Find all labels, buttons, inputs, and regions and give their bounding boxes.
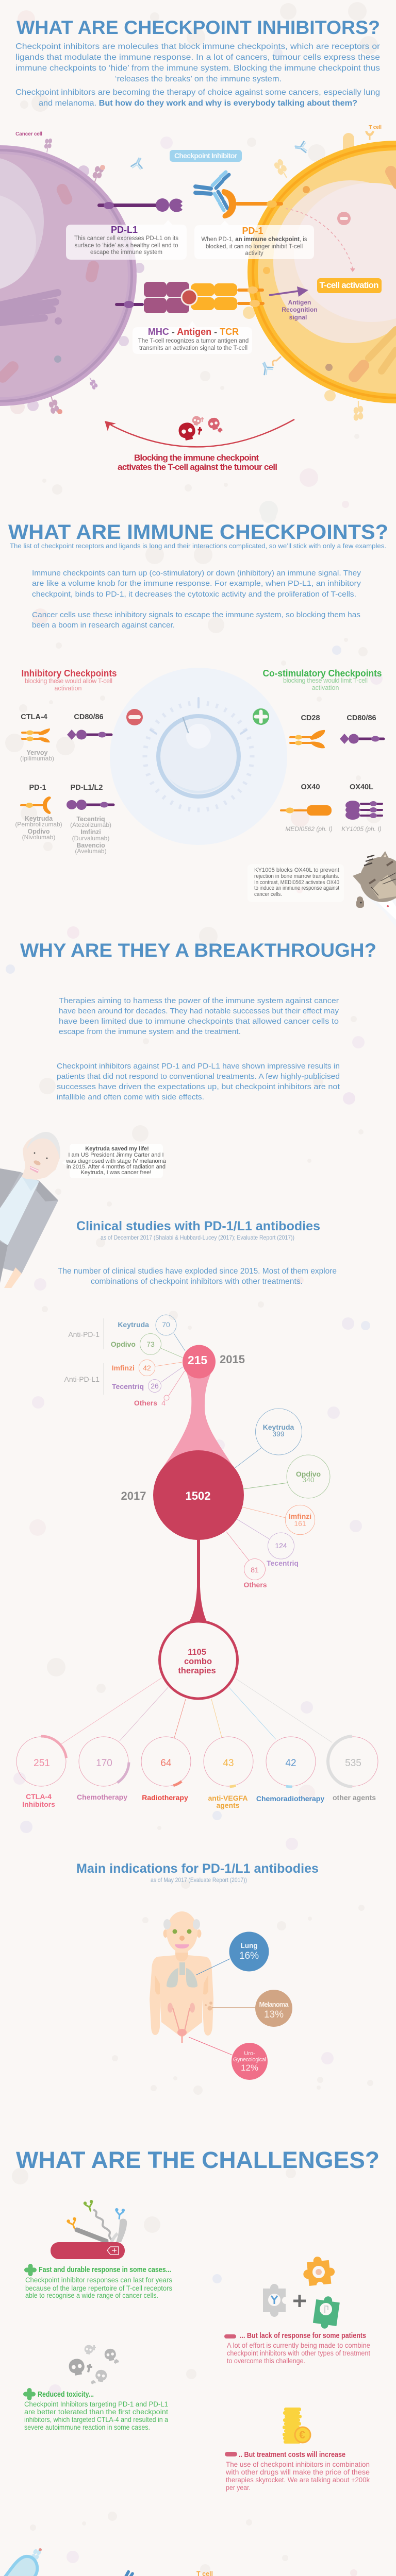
inhibitory pair: CD80/86: CD80/86: [74, 713, 104, 721]
indication: uro-gynecological: Uro-: [244, 2050, 255, 2057]
text block: therapies: escape from the immune system and the treatment.: [59, 1027, 241, 1036]
inhibitory pair: PD-L1/L2: Tecentriq: [76, 816, 105, 823]
speech bubble: Keytruda saved my life: Keytruda saved my life!: [85, 1146, 149, 1152]
challenge: treatment costs: [225, 2451, 370, 2492]
intro text block: ‘releases the breaks’ on the immune system.: [115, 75, 282, 83]
callout: PD-1: When PD-1, an immune checkpoint, is: [201, 236, 307, 243]
text block: clinical studies intro: combinations of checkpoint inhibitors with other treatments.: [91, 1277, 303, 1286]
callout: PD-1: blocked, it can no longer inhibit T-cell: [206, 244, 303, 250]
indication: uro-gynecological: 12%: [241, 2063, 258, 2073]
advantage: reduced toxicity: [24, 2391, 168, 2431]
callout: MHC antigen TCR: transmits an activation signal to the T-cell: [139, 345, 248, 351]
molecule: MHC antigen TCR complex: [115, 282, 265, 313]
text block: clinical studies intro: The number of clinical studies have exploded since 2015. Most of them explore: [58, 1267, 337, 1276]
arrow: antigen recognition signal: Recognition: [282, 306, 318, 313]
heading: co-stimulatory checkpoints: Co-stimulatory Checkpoints: [263, 668, 382, 679]
text block: therapies: Therapies aiming to harness the power of the immune system against cancer: [59, 996, 339, 1005]
molecule: checkpoint inhibitor antibody: [195, 172, 229, 210]
label: checkpoint inhibitor: Checkpoint Inhibitor: [174, 151, 238, 160]
2015 breakdown: Opdivo: [111, 1340, 136, 1348]
2017 bubble: [121, 1450, 244, 1540]
inhibitory pair: PD-1: Keytruda: [25, 815, 53, 822]
arrow: antigen recognition signal: signal: [289, 314, 307, 321]
title: what are immune checkpoints: WHAT ARE IMMUNE CHECKPOINTS?: [8, 521, 388, 544]
combination therapies bubble: 1105: [188, 1648, 206, 1657]
title: what are checkpoint inhibitors: WHAT ARE CHECKPOINT INHIBITORS?: [16, 17, 380, 38]
speech bubble: Keytruda saved my life: in 2015. After 4 months of radiation and: [67, 1164, 166, 1170]
small floating antibodies: [130, 141, 307, 376]
2017 bubble: 1502: [186, 1489, 210, 1502]
callout: PD-L1: surface to ‘hide’ as a healthy cell and to: [75, 243, 178, 249]
indication: lung: Lung: [240, 1942, 258, 1950]
indication: melanoma: [212, 1990, 292, 2027]
inhibitory pair: PD-1: PD-1: [29, 784, 46, 792]
text block: immune checkpoints: Cancer cells use these inhibitory signals to escape the immune system, so blocking them has: [32, 611, 360, 619]
inhibitory pair: PD-L1/L2: (Atezolizumab): [70, 821, 111, 828]
therapy: CTLA-4 inhibitors: [16, 1736, 67, 1808]
co-stimulatory pair: OX40: OX40: [301, 783, 320, 791]
heading: co-stimulatory checkpoints: activation: [312, 684, 339, 691]
inhibitory pair: CD80/86: [67, 713, 111, 740]
co-stimulatory pair: OX40: MEDI0562 (ph. I): [285, 825, 333, 833]
inhibitory pair: PD-1: (Nivolumab): [22, 834, 55, 841]
illustration: T cell: [243, 131, 396, 420]
2015 breakdown: [64, 1315, 185, 1407]
challenge: lack of response: [224, 2332, 370, 2365]
indication: uro-gynecological: [189, 2037, 268, 2080]
inhibitory pair: PD-L1/L2: (Avelumab): [75, 848, 107, 855]
2017 breakdown: Imfinzi: [289, 1512, 311, 1520]
indication: lung: 16%: [239, 1951, 259, 1961]
therapy: radiotherapy: [130, 1726, 202, 1802]
heading: clinical studies: Clinical studies with PD-1/L1 antibodies: [76, 1219, 320, 1233]
inhibitory pair: PD-L1/L2: Imfinzi: [80, 828, 101, 836]
illustration: puzzle pieces: [263, 2255, 340, 2330]
2017 breakdown: 124: [275, 1541, 287, 1550]
2017 breakdown: Others: [243, 1581, 267, 1589]
text block: therapies: have been around for decades. They had notable successes but their effect may: [59, 1007, 339, 1015]
callout: KY1005 note: cancer cells.: [254, 891, 282, 897]
therapy: other agents: 535: [345, 1758, 361, 1769]
callout: KY1005 note: rejection in bone marrow transplants.: [254, 873, 339, 879]
advantage: fast and durable response: Fast and durable response in some cases...: [39, 2266, 171, 2274]
therapy: anti-VEGFA agents: 43: [223, 1758, 234, 1769]
2017 breakdown: Keytruda: [263, 1423, 294, 1431]
advantage: fast and durable response: able to recognise a wide range of cancer cells.: [25, 2292, 158, 2299]
therapy: chemotherapy: 170: [96, 1758, 112, 1769]
therapy: chemoradiotherapy: 42: [285, 1758, 296, 1769]
icon: grey skulls: [68, 2344, 119, 2384]
co-stimulatory pair: OX40L: OX40L: [350, 783, 373, 791]
2017 bubble: 2017: [121, 1489, 146, 1502]
callout: PD-L1: [66, 220, 187, 260]
illustration: cat with lab coat and mouse: [353, 851, 396, 927]
advantage: reduced toxicity: Reduced toxicity...: [38, 2391, 94, 2399]
inhibitory pair: CTLA-4: (Ipilimumab): [20, 755, 54, 762]
label: checkpoint inhibitor: [170, 150, 242, 162]
illustration: antigen presenting cell: [0, 2548, 58, 2576]
therapy: anti-VEGFA agents: agents: [216, 1801, 240, 1809]
challenge: treatment costs: per year.: [226, 2484, 251, 2492]
2015 breakdown: 73: [146, 1340, 155, 1348]
inhibitory pair: PD-L1/L2: [67, 784, 113, 855]
heading: co-stimulatory checkpoints: blocking these would limit T-cell: [283, 677, 368, 684]
therapy: anti-VEGFA agents: [197, 1730, 260, 1809]
therapy: chemotherapy: [77, 1735, 130, 1801]
callout: KY1005 note: [248, 864, 344, 902]
co-stimulatory pair: CD28: [290, 714, 325, 748]
callout: PD-1: activity: [245, 250, 263, 257]
2015 bubble: [183, 1345, 245, 1379]
callout: PD-L1: PD-L1: [111, 225, 138, 235]
speech bubble: Keytruda saved my life: [62, 1144, 167, 1178]
icon: coin stack: €: [299, 2429, 305, 2441]
inhibitory pair: CTLA-4: CTLA-4: [21, 713, 47, 721]
indication: melanoma: 13%: [264, 2009, 284, 2020]
text block: immune checkpoints: been a boom in research against cancer.: [32, 621, 175, 630]
text block: immune checkpoints: are like a volume knob for the immune response. For example, when PD-L1, an inhibitory: [32, 579, 361, 588]
inhibitory pair: CTLA-4: [20, 713, 54, 762]
therapy: anti-VEGFA agents: anti-VEGFA: [208, 1794, 248, 1802]
2017 breakdown: 161: [294, 1519, 306, 1528]
text block: results: patients that did not respond to conventional treatments. A few highly-publicised: [57, 1072, 340, 1081]
chart: clinical studies bubble flow: [16, 1315, 380, 1809]
2015 breakdown: Tecentriq: [112, 1382, 144, 1391]
arrow: red arc: [105, 419, 294, 447]
inhibitory pair: PD-1: [15, 784, 62, 841]
2017 breakdown: 399: [272, 1430, 285, 1438]
label: T-cell activation: T-cell activation: [320, 280, 378, 290]
intro text block: Checkpoint inhibitors are becoming the therapy of choice against some cancers, especially lung: [15, 88, 380, 97]
heading: inhibitory checkpoints: Inhibitory Checkpoints: [22, 668, 117, 679]
advantage: reduced toxicity: Checkpoint Inhibitors targeting PD-1 and PD-L1: [24, 2400, 168, 2408]
inhibitory pair: PD-L1/L2: PD-L1/L2: [71, 784, 103, 792]
text: blocking the immune checkpoint: activates the T-cell against the tumour cell: [118, 462, 277, 472]
advantage: fast and durable response: because of the large repertoire of T-cell receptors: [25, 2284, 172, 2292]
therapy: other agents: [327, 1735, 380, 1802]
2015 breakdown: Anti-PD-1: [68, 1330, 100, 1338]
2017 breakdown: 81: [251, 1566, 259, 1574]
heading: co-stimulatory checkpoints: [263, 668, 382, 691]
intro text block: ligands that modulate the immune response. In a lot of cancers, tumour cells express these: [15, 53, 380, 62]
co-stimulatory pair: CD80/86: CD80/86: [346, 714, 376, 722]
2015 bubble: 215: [188, 1353, 207, 1367]
challenge: lack of response: ... But lack of response for some patients: [240, 2332, 366, 2340]
2015 bubble: 2015: [220, 1353, 245, 1366]
heading: inhibitory checkpoints: [22, 668, 117, 692]
volume knob dial: [110, 668, 287, 845]
co-stimulatory pair: CD80/86: [340, 714, 384, 744]
callout: MHC antigen TCR: [133, 321, 252, 354]
label: cancer cell: Cancer cell: [15, 131, 42, 137]
therapy: chemotherapy: Chemotherapy: [77, 1793, 127, 1801]
callout: PD-1: [194, 221, 314, 259]
speech bubble: Keytruda saved my life: Keytruda, I was cancer free!: [81, 1170, 151, 1176]
illustration: swiss army knife: [51, 2200, 127, 2259]
illustration: human body: [150, 1911, 213, 2043]
callout: PD-L1: This cancer cell expresses PD-L1 on its: [74, 235, 178, 242]
co-stimulatory pair: OX40L: [341, 783, 382, 833]
challenge: lack of response: A lot of effort is currently being made to combine: [227, 2342, 370, 2349]
heading: main indications: Main indications for PD-1/L1 antibodies: [76, 1861, 319, 1876]
illustration: cancer cell: [0, 138, 144, 414]
speech bubble: Keytruda saved my life: I am US President Jimmy Carter and I: [68, 1152, 164, 1158]
text block: results: [57, 1062, 340, 1101]
text: blocking the immune checkpoint: Blocking the immune checkpoint: [134, 453, 259, 463]
intro text block: [15, 42, 381, 108]
challenge: treatment costs: with other drugs will make the price of these: [225, 2468, 370, 2476]
connectors to therapy circles: [61, 1678, 332, 1744]
subtitle: The list of checkpoint receptors and ligands is long and their interactions complicated, so we’ll stick with only a few examples.: [10, 543, 386, 550]
callout: KY1005 note: to induce an immune response against: [254, 885, 339, 891]
text block: immune checkpoints: Immune checkpoints can turn up (co-stimulatory) or down (inhibitory) an immune signal. They: [32, 569, 361, 578]
icon: plus: [253, 708, 269, 725]
molecule: PD-1: [222, 189, 283, 218]
2015 breakdown: 4: [161, 1399, 166, 1407]
2015 breakdown: Anti-PD-L1: [64, 1375, 100, 1383]
2015 breakdown: 70: [162, 1320, 170, 1329]
text block: results: successes have driven the expectations up, but checkpoint inhibitors are not: [57, 1082, 340, 1091]
advantage: fast and durable response: Checkpoint inhibitor responses can last for years: [25, 2276, 172, 2284]
funnel neck between 2015 and 2017: [164, 1373, 234, 1467]
co-stimulatory pair: OX40: [281, 783, 333, 833]
heading: clinical studies: as of December 2017 (Shalabi & Hubbard-Lucey (2017); Evaluate Report (2017)): [101, 1234, 294, 1241]
arrow: antigen recognition signal: [269, 286, 318, 321]
therapy: CTLA-4 inhibitors: Inhibitors: [22, 1800, 55, 1808]
callout: MHC antigen TCR: MHC - Antigen - TCR: [148, 327, 239, 337]
text: blocking the immune checkpoint: [118, 453, 277, 472]
2017 breakdown: [226, 1409, 330, 1589]
2015 breakdown: Keytruda: [118, 1320, 149, 1329]
2015 breakdown: 42: [143, 1364, 151, 1372]
therapy: chemoradiotherapy: [256, 1735, 324, 1803]
therapy: radiotherapy: 64: [160, 1758, 172, 1769]
2015 breakdown: Imfinzi: [112, 1364, 135, 1372]
text block: results: infallible and often come with side effects.: [57, 1093, 204, 1101]
challenge: lack of response: to overcome this challenge.: [227, 2357, 305, 2365]
title: what are the challenges: WHAT ARE THE CHALLENGES?: [16, 2147, 380, 2173]
text block: immune checkpoints: [32, 569, 361, 630]
therapy: radiotherapy: Radiotherapy: [142, 1793, 188, 1802]
advantage: reduced toxicity: inhibitors, which targeted CTLA-4 and resulted in a: [24, 2416, 168, 2424]
arrow: antigen recognition signal: Antigen: [288, 299, 311, 306]
text block: clinical studies intro: [58, 1267, 337, 1286]
2017 breakdown: 340: [302, 1476, 315, 1484]
challenge: treatment costs: therapies skyrocket. We are talking about +200k: [226, 2476, 370, 2484]
icon: red skulls: [177, 415, 223, 442]
heading: main indications: as of May 2017 (Evaluate Report (2017)): [151, 1876, 247, 1884]
intro text block: immune checkpoints to ‘hide’ from the immune system. Blocking the immune checkpoint thus: [15, 64, 380, 73]
combination therapies bubble: [160, 1621, 237, 1699]
callout: PD-L1: escape the immune system: [90, 249, 162, 256]
callout: KY1005 note: In contrast, MEDI0562 activates OX40: [254, 879, 339, 886]
therapy: other agents: other agents: [333, 1793, 376, 1802]
challenge: treatment costs: The use of checkpoint inhibitors in combination: [226, 2461, 370, 2468]
intro text block: Checkpoint inhibitors are molecules that block immune checkpoints, which are receptors or: [15, 42, 381, 51]
therapy: chemoradiotherapy: Chemoradiotherapy: [256, 1794, 324, 1803]
inhibitory pair: CTLA-4: Yervoy: [26, 749, 48, 756]
icon: minus: [126, 709, 143, 725]
advantage: reduced toxicity: are better tolerated than the first checkpoint: [24, 2408, 168, 2416]
indication: uro-gynecological: Gynecological: [233, 2057, 266, 2063]
therapy: CTLA-4 inhibitors: 251: [34, 1758, 50, 1769]
intro text block: and melanoma. But how do they work and why is everybody talking about them?: [39, 99, 357, 108]
callout: MHC antigen TCR: The T-cell recognizes a tumor antigen and: [138, 338, 249, 344]
indication: lung: [196, 1932, 269, 1975]
advantage: fast and durable response: [25, 2266, 172, 2299]
callout: PD-1: PD-1: [242, 226, 263, 236]
co-stimulatory pair: CD28: CD28: [301, 714, 320, 722]
2015 breakdown: 26: [151, 1382, 159, 1390]
inhibitory pair: PD-L1/L2: (Durvalumab): [72, 835, 109, 842]
illustration: Jimmy Carter: [0, 1132, 60, 1288]
complex: CTLA-4 with antibody: [91, 2566, 145, 2576]
heading: inhibitory checkpoints: blocking these would allow T-cell: [25, 677, 112, 685]
callout: KY1005 note: KY1005 blocks OX40L to prevent: [254, 867, 339, 873]
title: why are they a breakthrough: WHY ARE THEY A BREAKTHROUGH?: [20, 939, 376, 961]
speech bubble: Keytruda saved my life: was diagnosed with stage IV melanoma: [65, 1158, 167, 1164]
molecule: PD-L1: [97, 198, 183, 212]
label: T cell: T cell: [369, 124, 382, 130]
combination therapies bubble: therapies: [178, 1666, 216, 1675]
heading: clinical studies: [76, 1219, 320, 1241]
indication: melanoma: Melanoma: [259, 2001, 289, 2008]
icon: coin stack: [283, 2408, 310, 2444]
text block: results: Checkpoint inhibitors against PD-1 and PD-L1 have shown impressive results in: [57, 1062, 340, 1071]
inhibitory pair: PD-1: Opdivo: [27, 828, 50, 835]
combination therapies bubble: combo: [184, 1657, 212, 1666]
challenge: treatment costs: .. But treatment costs will increase: [239, 2451, 345, 2459]
therapy: CTLA-4 inhibitors: CTLA-4: [26, 1792, 52, 1801]
text block: therapies: have been limited due to immune checkpoints that allowed cancer cells to: [59, 1017, 339, 1026]
heading: main indications: [76, 1861, 319, 1884]
challenge: lack of response: checkpoint inhibitors with other types of treatment: [227, 2349, 370, 2357]
label: T-cell activation: [317, 278, 382, 293]
2015 breakdown: Others: [134, 1399, 157, 1407]
heading: inhibitory checkpoints: activation: [55, 685, 81, 692]
inhibitory pair: PD-1: (Pembrolizumab): [15, 821, 62, 828]
text block: therapies: [59, 996, 339, 1036]
text block: immune checkpoints: checkpoint, binds to PD-1, it decreases the cytotoxic activity and the proliferation of T-cells.: [32, 590, 356, 599]
advantage: reduced toxicity: severe autoimmune reaction in some cases.: [24, 2424, 150, 2431]
inhibitory pair: PD-L1/L2: Bavencio: [76, 842, 105, 849]
2017 breakdown: Tecentriq: [267, 1559, 299, 1567]
co-stimulatory pair: OX40L: KY1005 (ph. I): [341, 825, 382, 833]
stem to combination bubble: [189, 1538, 207, 1621]
2017 breakdown: Opdivo: [296, 1470, 321, 1478]
